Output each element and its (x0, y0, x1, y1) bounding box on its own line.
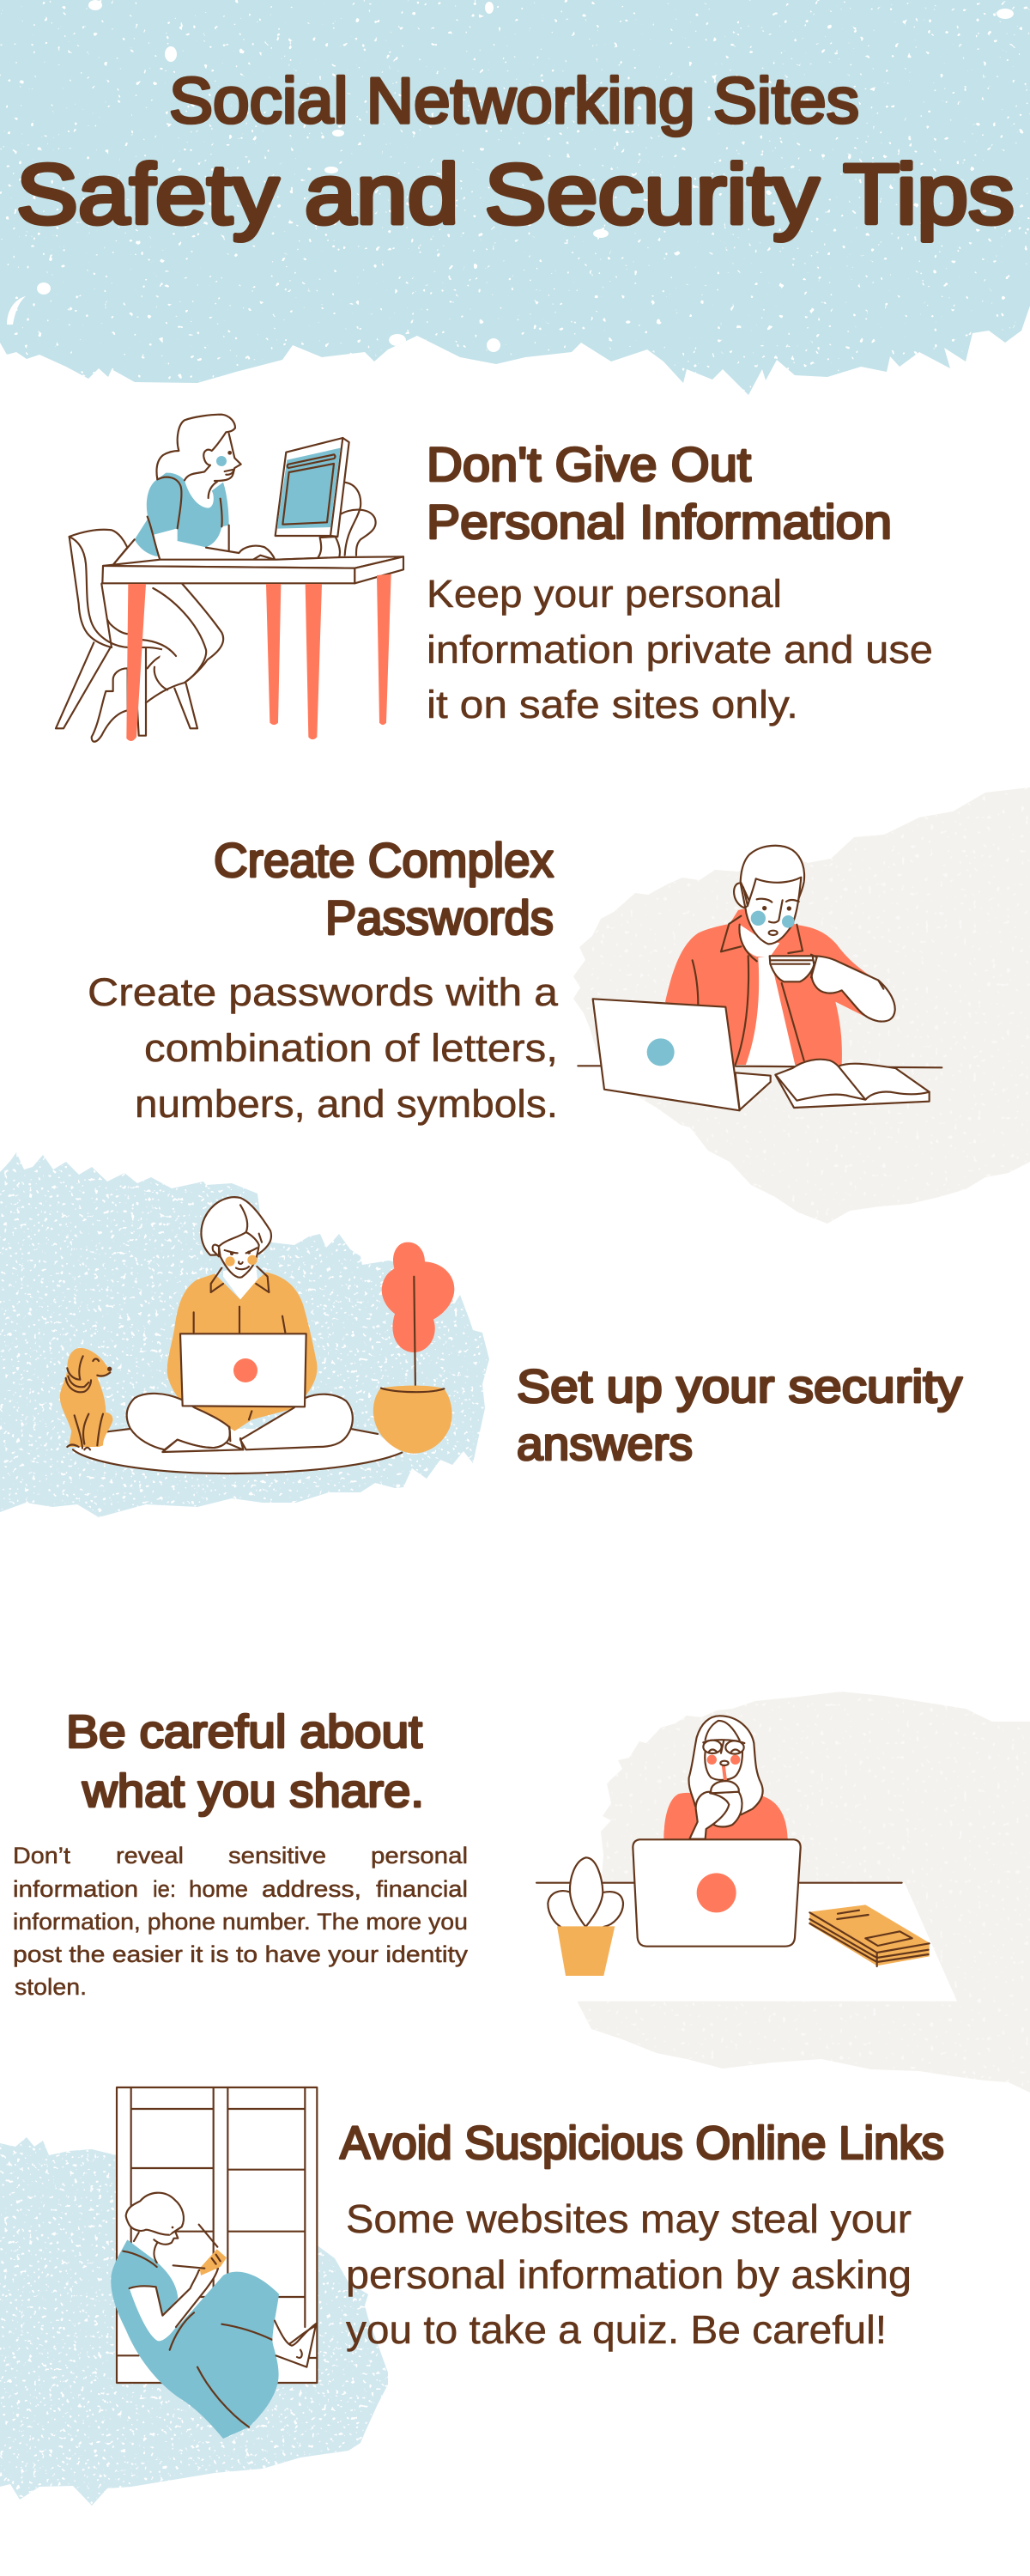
beige brush background: passwords (558, 773, 1030, 1236)
text block: create passwords: numbers, and symbols. (135, 1082, 558, 1126)
heading: Set up your security answers (517, 1361, 962, 1470)
beige brush background: share (558, 1683, 1030, 2104)
heading: Set up your security answers: Set up your security (517, 1361, 962, 1413)
text block: don't reveal sensitive information: reveal (116, 1843, 184, 1868)
text block: don't reveal sensitive information: information (13, 1876, 138, 1902)
heading: Don't Give Out Personal Information: Don't Give Out (427, 437, 751, 491)
heading: Don't Give Out Personal Information: Personal Information (427, 495, 892, 549)
heading: Be careful about what you share: Be careful about (66, 1706, 422, 1758)
blue brush background: security answers (0, 1152, 489, 1517)
text block: don't reveal sensitive information (13, 1843, 469, 2000)
text block: don't reveal sensitive information: information, phone number. The more you (13, 1909, 468, 1935)
heading: Set up your security answers: answers (517, 1419, 693, 1470)
heading: Be careful about what you share: what you share. (82, 1765, 424, 1817)
header banner: blue torn-paper band (0, 0, 1030, 404)
text block: don't reveal sensitive information: Don’t (13, 1843, 71, 1868)
text block: suspicious websites (346, 2196, 912, 2352)
text block: keep personal information private: information private and use (427, 628, 933, 671)
title (16, 64, 1015, 241)
title: Safety and Security Tips (16, 147, 1015, 241)
text block: don't reveal sensitive information: ie: (153, 1876, 176, 1902)
text block: create passwords: Create passwords with a (88, 970, 559, 1014)
text block: don't reveal sensitive information: post the easier it is to have your identity (13, 1941, 469, 1967)
blue brush background: online links (0, 2137, 388, 2506)
text block: don't reveal sensitive information: home (189, 1876, 248, 1902)
illustration: woman at desktop computer (56, 415, 403, 742)
text block: suspicious websites: you to take a quiz. Be careful! (346, 2307, 887, 2352)
text block: create passwords: combination of letters, (144, 1026, 558, 1070)
text block: don't reveal sensitive information: address, (262, 1876, 361, 1902)
illustration: woman on window sill with phone (111, 2087, 317, 2439)
text block: don't reveal sensitive information: personal (371, 1843, 468, 1868)
text block: don't reveal sensitive information: financial (376, 1876, 468, 1902)
title: Social Networking Sites (169, 64, 859, 137)
text block: don't reveal sensitive information: stolen. (15, 1974, 87, 2000)
text block: suspicious websites: personal information by asking (346, 2252, 912, 2297)
heading: Don't Give Out Personal Information (427, 437, 892, 549)
text block: keep personal information private: it on safe sites only. (427, 683, 798, 726)
illustration: person with laptop, dog and plant (60, 1197, 454, 1473)
text block: suspicious websites: Some websites may steal your (346, 2196, 912, 2241)
heading: Avoid Suspicious Online Links: Avoid Suspicious Online Links (340, 2117, 944, 2169)
illustration: woman with drink, laptop, plant and papers (515, 1716, 957, 2002)
heading: Create Complex Passwords: Passwords (325, 890, 554, 945)
text block: keep personal information private (427, 572, 933, 726)
text block: keep personal information private: Keep your personal (427, 572, 782, 616)
heading: Create Complex Passwords (214, 833, 554, 945)
heading: Create Complex Passwords: Create Complex (214, 833, 554, 887)
text block: don't reveal sensitive information: sensitive (228, 1843, 326, 1868)
illustration: man with laptop and coffee (578, 846, 942, 1110)
heading: Be careful about what you share (66, 1706, 424, 1817)
text block: create passwords (88, 970, 559, 1126)
